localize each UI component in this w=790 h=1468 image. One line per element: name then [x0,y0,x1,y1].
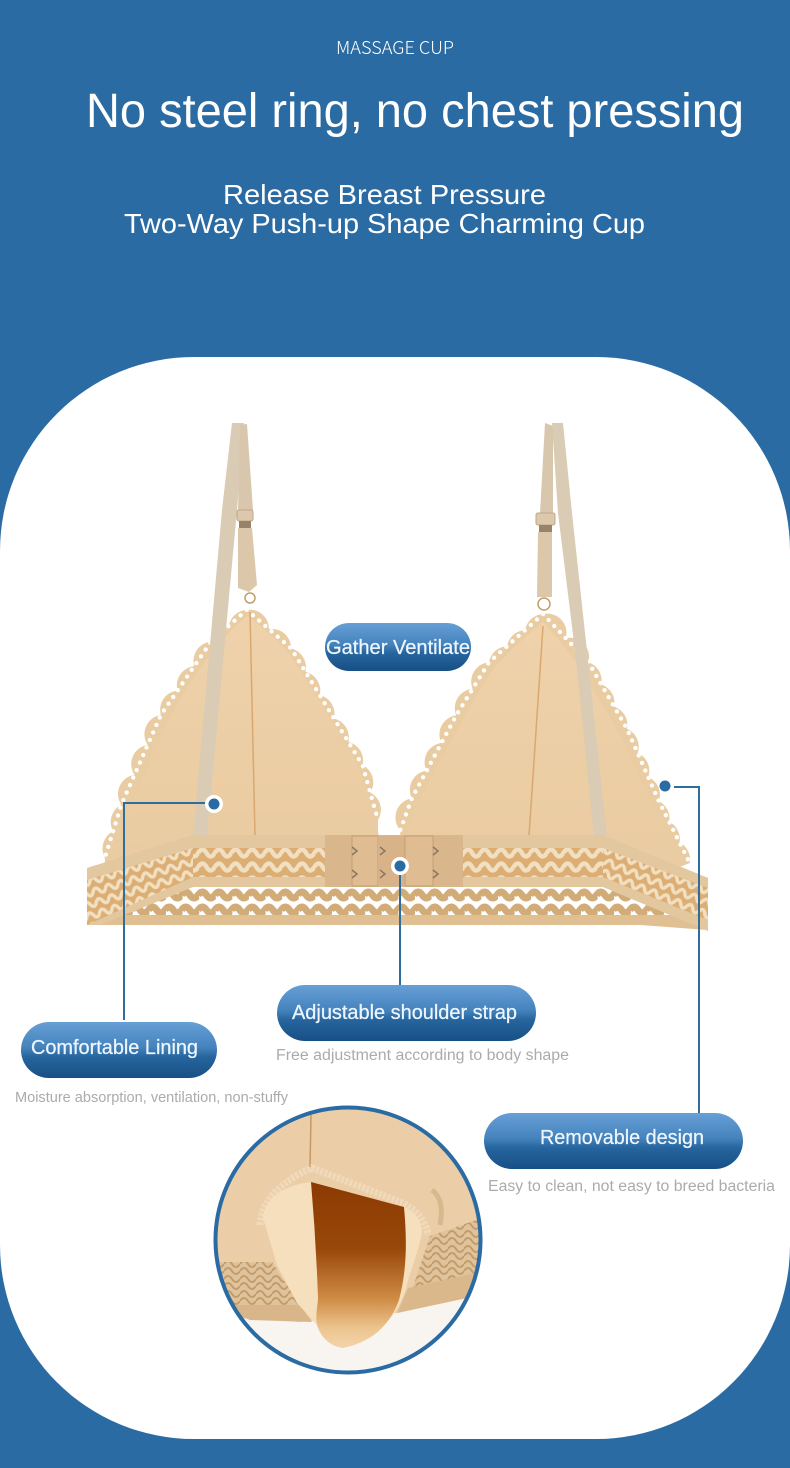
subtitle: Release Breast Pressure [223,179,546,210]
pill: gather ventilate: Gather Ventilate [326,637,470,659]
connector: removable design [660,780,699,1113]
title: No steel ring, no chest pressing [86,85,744,138]
left cup [103,610,381,871]
left strap [193,423,257,836]
pill: gather ventilate [325,623,471,671]
pill: adjustable shoulder strap: Adjustable shoulder strap [292,1002,517,1024]
pill: removable design: Removable design [540,1127,704,1149]
pill: adjustable shoulder strap [277,985,536,1041]
pill: comfortable lining: Comfortable Lining [31,1037,198,1059]
right cup [395,614,690,876]
connector: comfortable lining [124,795,223,1020]
caption: easy to clean: Easy to clean, not easy to breed bacteria [488,1178,775,1195]
upper lace band [87,835,708,931]
pill: removable design [484,1113,743,1169]
label: massage cup: MASSAGE CUP [336,34,454,60]
inset circle: removable pad detail [214,1106,482,1374]
caption: moisture absorption: Moisture absorption, ventilation, non-stuffy [15,1089,288,1106]
pill: comfortable lining [21,1022,217,1078]
right strap [536,423,607,836]
white panel [0,357,790,1439]
caption: free adjustment: Free adjustment according to body shape [276,1047,569,1064]
lower band [87,885,708,930]
connector: adjustable strap [391,857,409,985]
product photo: bra [87,423,708,931]
subtitle [124,179,645,239]
hook closure [325,835,463,887]
subtitle: Two-Way Push-up Shape Charming Cup [124,208,645,239]
